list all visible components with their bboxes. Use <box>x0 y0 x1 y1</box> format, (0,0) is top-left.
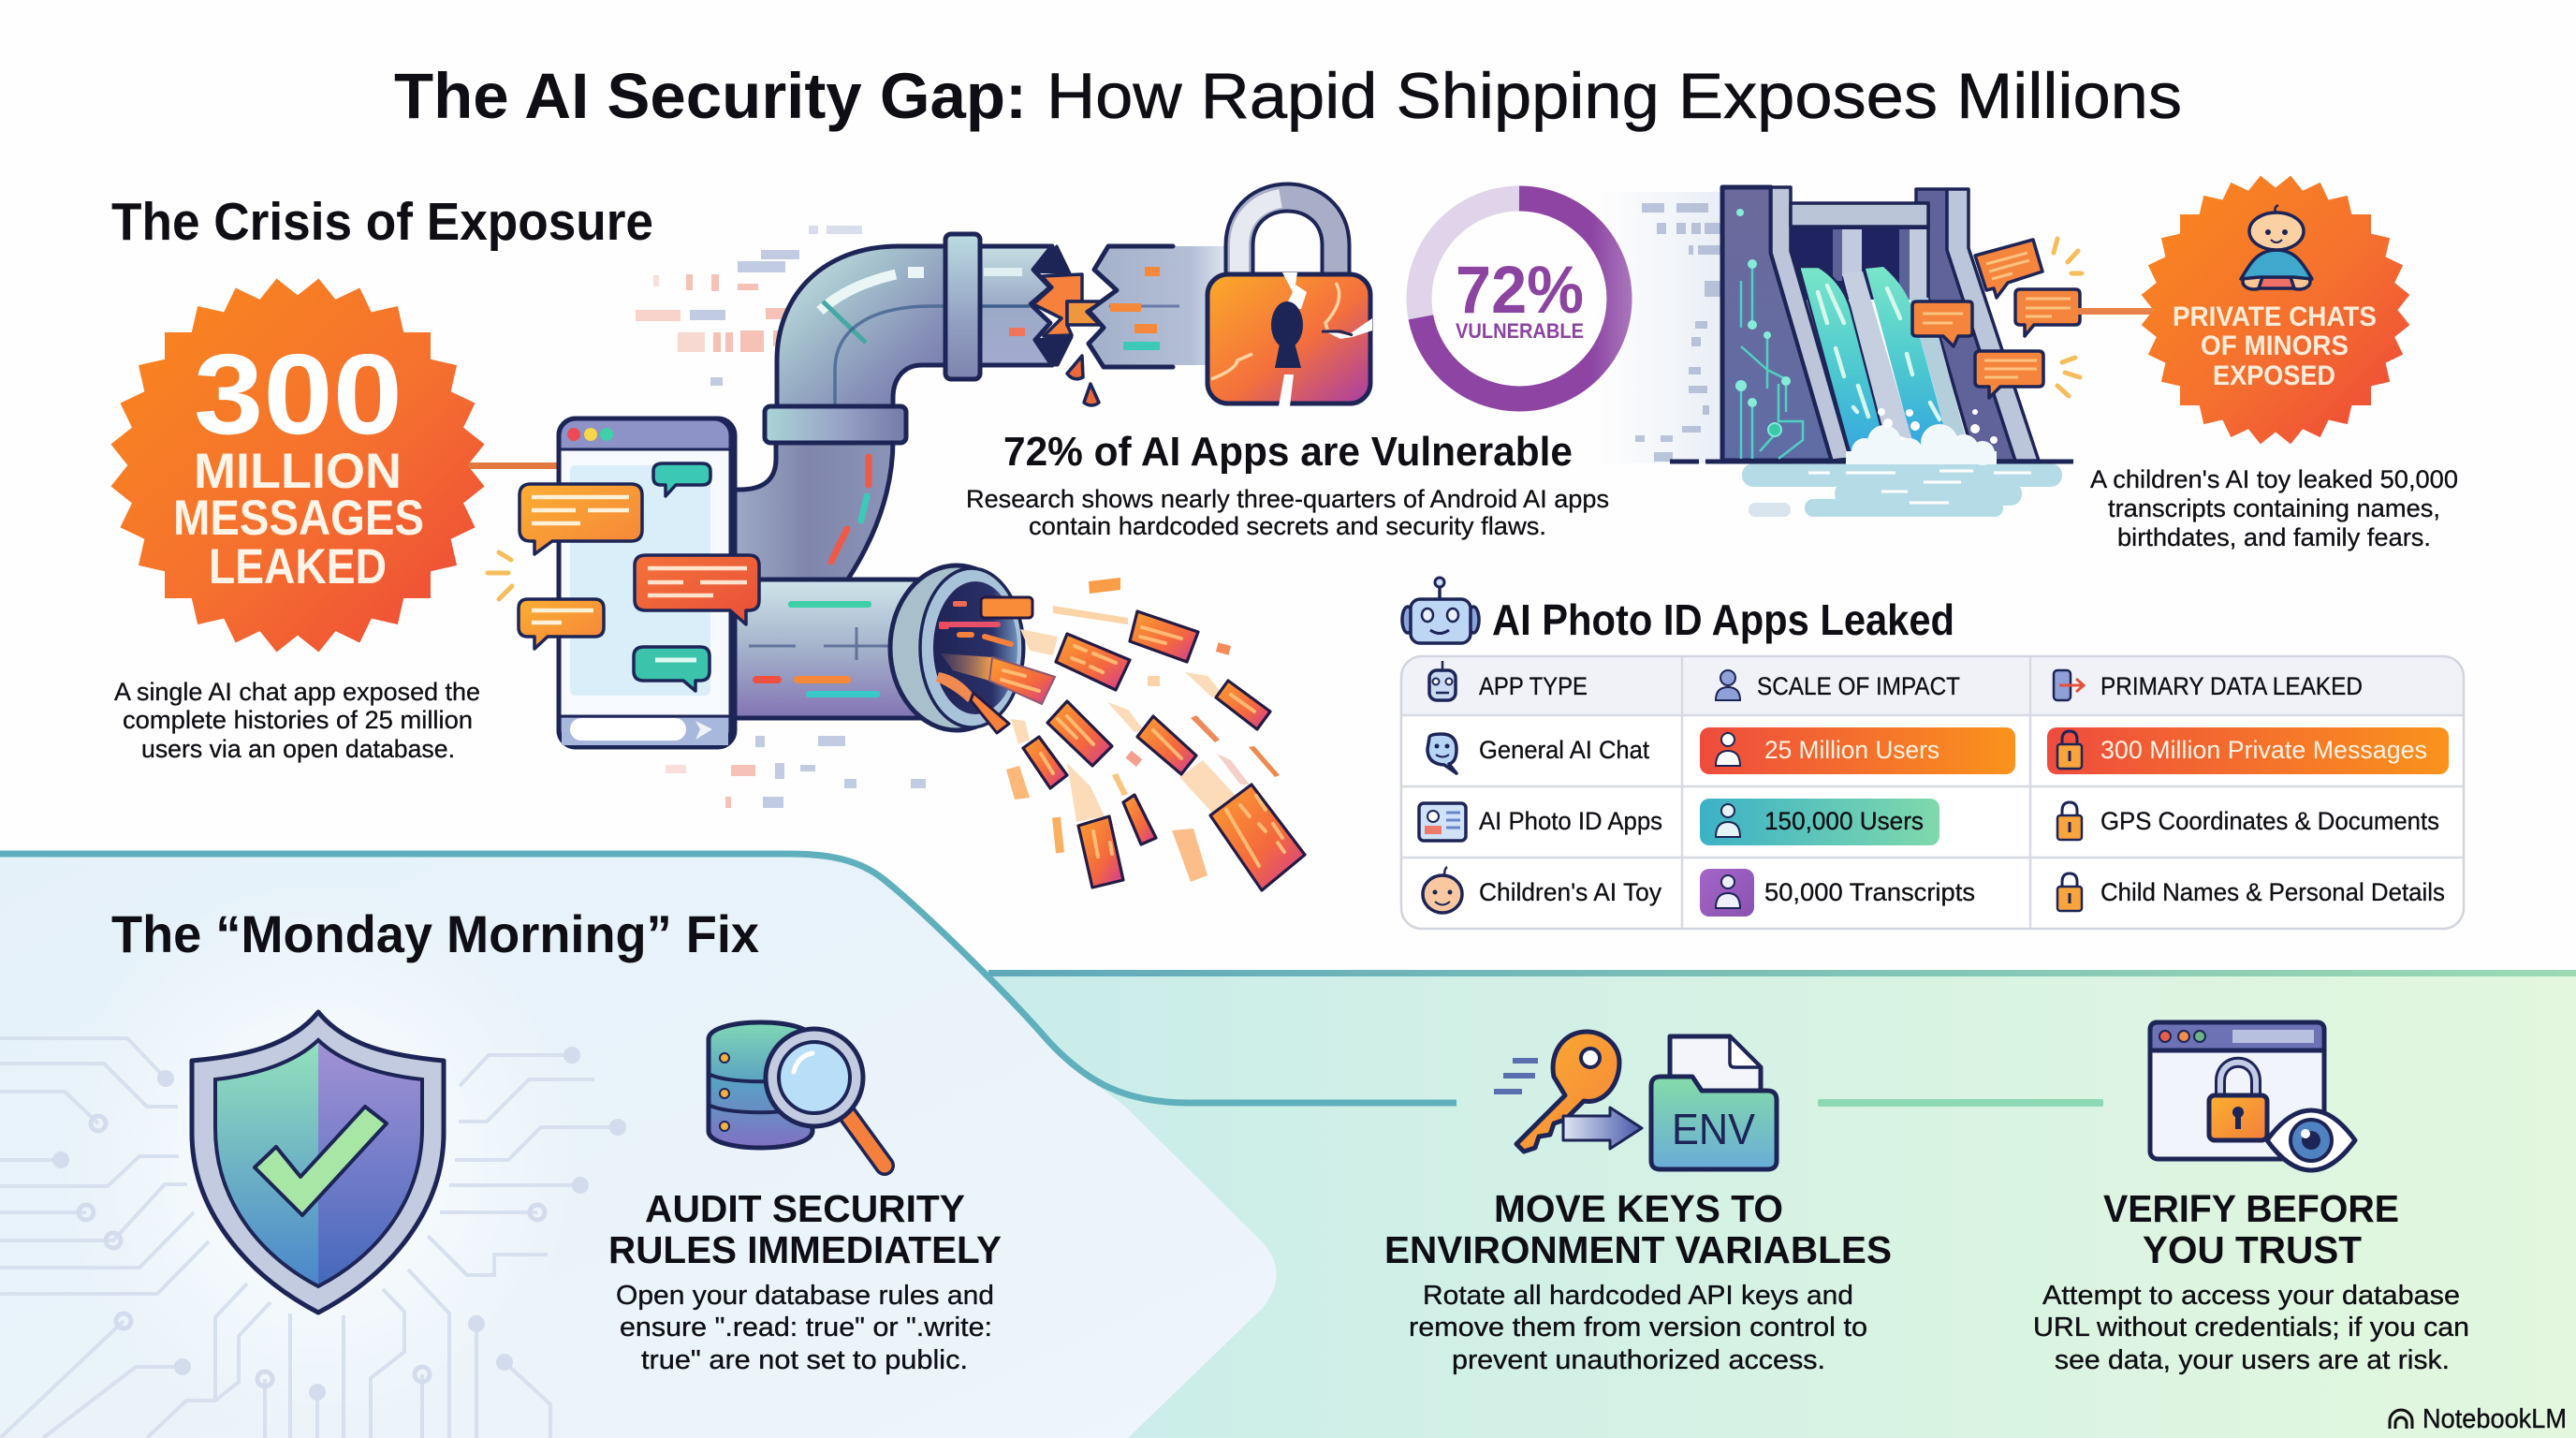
icon: broken padlock <box>1208 198 1372 406</box>
data cards <box>1023 611 1305 890</box>
step 3: verify before you trust: VERIFY BEFORE <box>2103 1187 2399 1230</box>
table row: children's AI toy: Children's AI Toy <box>1479 878 1661 906</box>
text: children's toy description: transcripts containing names, <box>2108 494 2440 522</box>
title <box>394 60 2182 132</box>
text: children's toy description: birthdates, and family fears. <box>2117 523 2431 551</box>
icon: key moving to ENV folder: ENV <box>1672 1105 1755 1153</box>
starburst: 300 million messages leaked: LEAKED <box>209 539 387 594</box>
pool <box>1742 463 2062 517</box>
icon: baby <box>2241 205 2312 289</box>
icon: header robot <box>1429 661 1456 700</box>
bubble orange <box>520 484 642 554</box>
icon: chat browser window <box>559 418 735 747</box>
pipe left segment broken <box>1033 246 1070 273</box>
text: children's toy description: A children's AI toy leaked 50,000 <box>2090 465 2458 493</box>
step 2: move keys to environment variables: MOVE KEYS TO <box>1494 1187 1783 1230</box>
left slab <box>1722 187 1832 461</box>
leak drops <box>1067 356 1083 379</box>
right slab <box>1916 189 2015 461</box>
pill: 50,000 transcripts <box>1700 869 1975 917</box>
table row: general AI chat <box>1427 727 2449 774</box>
glitch data fragments around pipe <box>636 226 926 808</box>
starburst: 300 million messages leaked: 300 <box>194 330 402 458</box>
text: single app description <box>114 678 480 763</box>
dam haze and fragments <box>1591 192 1727 463</box>
icon: lock <box>2057 802 2082 840</box>
pipe flange opening <box>890 565 1023 730</box>
panel: the crisis of exposure <box>103 173 2458 890</box>
step 1: audit security rules: Open your database rules and <box>616 1281 994 1311</box>
small fragments <box>1006 578 1280 882</box>
donut chart: 72% vulnerable: VULNERABLE <box>1456 319 1584 343</box>
icon: robot <box>1402 578 1479 643</box>
step 1: audit security rules: AUDIT SECURITY <box>645 1187 965 1230</box>
table header row <box>1429 661 2363 700</box>
spark marks <box>2054 239 2082 396</box>
icon: ID card <box>1419 803 1466 841</box>
text: single app description: users via an open database. <box>141 735 455 763</box>
ground line <box>1670 459 2073 464</box>
table row: AI photo ID apps: AI Photo ID Apps <box>1479 807 1662 835</box>
table row: children's AI toy <box>1423 867 2445 917</box>
pipe right segment broken <box>1089 246 1226 365</box>
starburst: private chats of minors exposed: EXPOSED <box>2213 360 2335 391</box>
table header row: PRIMARY DATA LEAKED <box>2100 672 2363 700</box>
icon: header data leak <box>2054 670 2084 700</box>
starburst: private chats of minors exposed: OF MINORS <box>2201 330 2349 361</box>
text: 72% heading and body: contain hardcoded secrets and security flaws. <box>1029 512 1546 540</box>
dam bubbles <box>1912 240 2080 398</box>
text: single app description: A single AI chat app exposed the <box>114 678 480 706</box>
table row: general AI chat: General AI Chat <box>1479 736 1649 764</box>
step 3: verify before you trust: YOU TRUST <box>2143 1228 2362 1271</box>
panel: AI photo ID apps table <box>1401 578 2464 929</box>
title: The AI Security Gap: <box>394 60 1027 132</box>
pipe: lower run <box>725 580 936 718</box>
orange shards in break <box>1033 274 1082 336</box>
step 2: move keys to environment variables <box>1384 1032 1892 1375</box>
panel: green steps background <box>988 970 2576 1438</box>
donut chart: 72% vulnerable <box>1419 198 1619 399</box>
connector line right <box>2078 308 2153 315</box>
heading: AI photo ID apps leaked: AI Photo ID Apps Leaked <box>1492 595 1954 644</box>
foam <box>1846 424 1997 465</box>
pill: 25 million users: 25 Million Users <box>1764 736 1939 764</box>
step 3: verify before you trust: see data, your users are at risk. <box>2055 1345 2450 1375</box>
illustration: bursting data dam <box>1591 187 2082 517</box>
icon: chat bot <box>1427 734 1456 773</box>
motion trails <box>1011 606 1250 822</box>
table frame <box>1401 656 2464 929</box>
pill: 50,000 transcripts: 50,000 Transcripts <box>1764 878 1975 906</box>
step 1: audit security rules: true" are not set to public. <box>641 1345 968 1375</box>
pill: 150,000 users: 150,000 Users <box>1764 807 1924 835</box>
table header row: APP TYPE <box>1479 672 1588 700</box>
pill: 25 million users <box>1700 727 2015 774</box>
step 1: audit security rules: ensure ".read: true" or ".write: <box>620 1313 992 1343</box>
cards at pipe mouth <box>971 597 1055 733</box>
logo: NotebookLM: NotebookLM <box>2422 1404 2567 1434</box>
step 2: move keys to environment variables: prevent unauthorized access. <box>1452 1345 1825 1375</box>
starburst: 300 million messages leaked: MILLION <box>194 444 402 499</box>
connector line <box>468 462 562 469</box>
text: single app description: complete histories of 25 million <box>123 706 473 734</box>
table header row: SCALE OF IMPACT <box>1757 672 1960 700</box>
center pillar <box>1842 271 1912 440</box>
pipe collar <box>765 406 906 443</box>
data spray from pipe <box>971 578 1305 890</box>
heading: Monday morning fix: The “Monday Morning” Fix <box>111 904 759 963</box>
heading: the crisis of exposure: The Crisis of Exposure <box>111 192 653 252</box>
pipe collar right <box>945 234 980 379</box>
icon: child face <box>1423 867 1462 913</box>
starburst: 300 million messages leaked: MESSAGES <box>173 491 424 546</box>
step 3: verify before you trust: Attempt to access your database <box>2042 1281 2460 1311</box>
bubble teal bottom <box>634 647 710 691</box>
pipe: vertical to lower run <box>725 440 893 580</box>
pill: 150,000 users <box>1700 799 1939 845</box>
opening pillars <box>1833 229 1928 300</box>
bubble red <box>635 555 759 624</box>
flow connector lines <box>0 854 2103 1107</box>
icon: database with magnifier <box>709 1022 885 1166</box>
text: 72% heading and body: 72% of AI Apps are Vulnerable <box>1003 429 1573 475</box>
text: children's toy description <box>2090 465 2458 551</box>
starburst: private chats of minors exposed: PRIVATE CHATS <box>2173 301 2377 332</box>
icon: key moving to ENV folder <box>1494 1032 1777 1169</box>
pill: 300 million private messages: 300 Million Private Messages <box>2100 736 2427 764</box>
step 2: move keys to environment variables: remove them from version control to <box>1409 1313 1867 1343</box>
illustration: leaking pipe <box>725 234 1226 730</box>
chat bubbles around browser <box>488 463 759 691</box>
step 3: verify before you trust: URL without credentials; if you can <box>2033 1313 2469 1343</box>
panel: the Monday morning fix <box>0 854 1277 1438</box>
text: 72% heading and body: Research shows nearly three-quarters of Android AI apps <box>966 485 1609 513</box>
light band under bubbles <box>1910 298 1968 445</box>
icon: header person <box>1716 670 1740 700</box>
table row: AI photo ID apps: GPS Coordinates & Documents <box>2100 807 2439 835</box>
crossbar <box>1791 203 1928 227</box>
bubble teal top <box>653 463 710 496</box>
pill: 300 million private messages <box>2047 727 2449 774</box>
circuit traces on dam <box>1741 264 1803 459</box>
step 2: move keys to environment variables: Rotate all hardcoded API keys and <box>1423 1281 1853 1311</box>
step 1: audit security rules: RULES IMMEDIATELY <box>608 1228 1002 1271</box>
step 3: verify before you trust <box>2033 1022 2469 1375</box>
step 1: audit security rules <box>608 1022 1002 1375</box>
circuit traces <box>0 1038 626 1438</box>
table row: AI photo ID apps <box>1419 799 2439 845</box>
bubble orange small <box>519 599 604 649</box>
card text dashes <box>1002 627 1284 866</box>
title: How Rapid Shipping Exposes Millions <box>1046 60 2182 132</box>
step 2: move keys to environment variables: ENVIRONMENT VARIABLES <box>1384 1228 1892 1271</box>
icon: shield with check <box>192 1012 444 1313</box>
water channels <box>1799 267 1883 459</box>
text: 72% heading and body <box>966 429 1609 540</box>
spark marks <box>488 552 512 599</box>
icon: browser with lock and eye <box>2150 1022 2355 1170</box>
starburst: private chats of minors exposed <box>2139 173 2412 447</box>
donut chart: 72% vulnerable: 72% <box>1456 254 1584 328</box>
pipe: upper elbow <box>777 246 947 408</box>
starburst: 300 million messages leaked <box>103 271 492 659</box>
table row: children's AI toy: Child Names & Personal Details <box>2100 878 2445 906</box>
dark opening <box>1791 227 1928 300</box>
icon: lock <box>2057 873 2082 911</box>
